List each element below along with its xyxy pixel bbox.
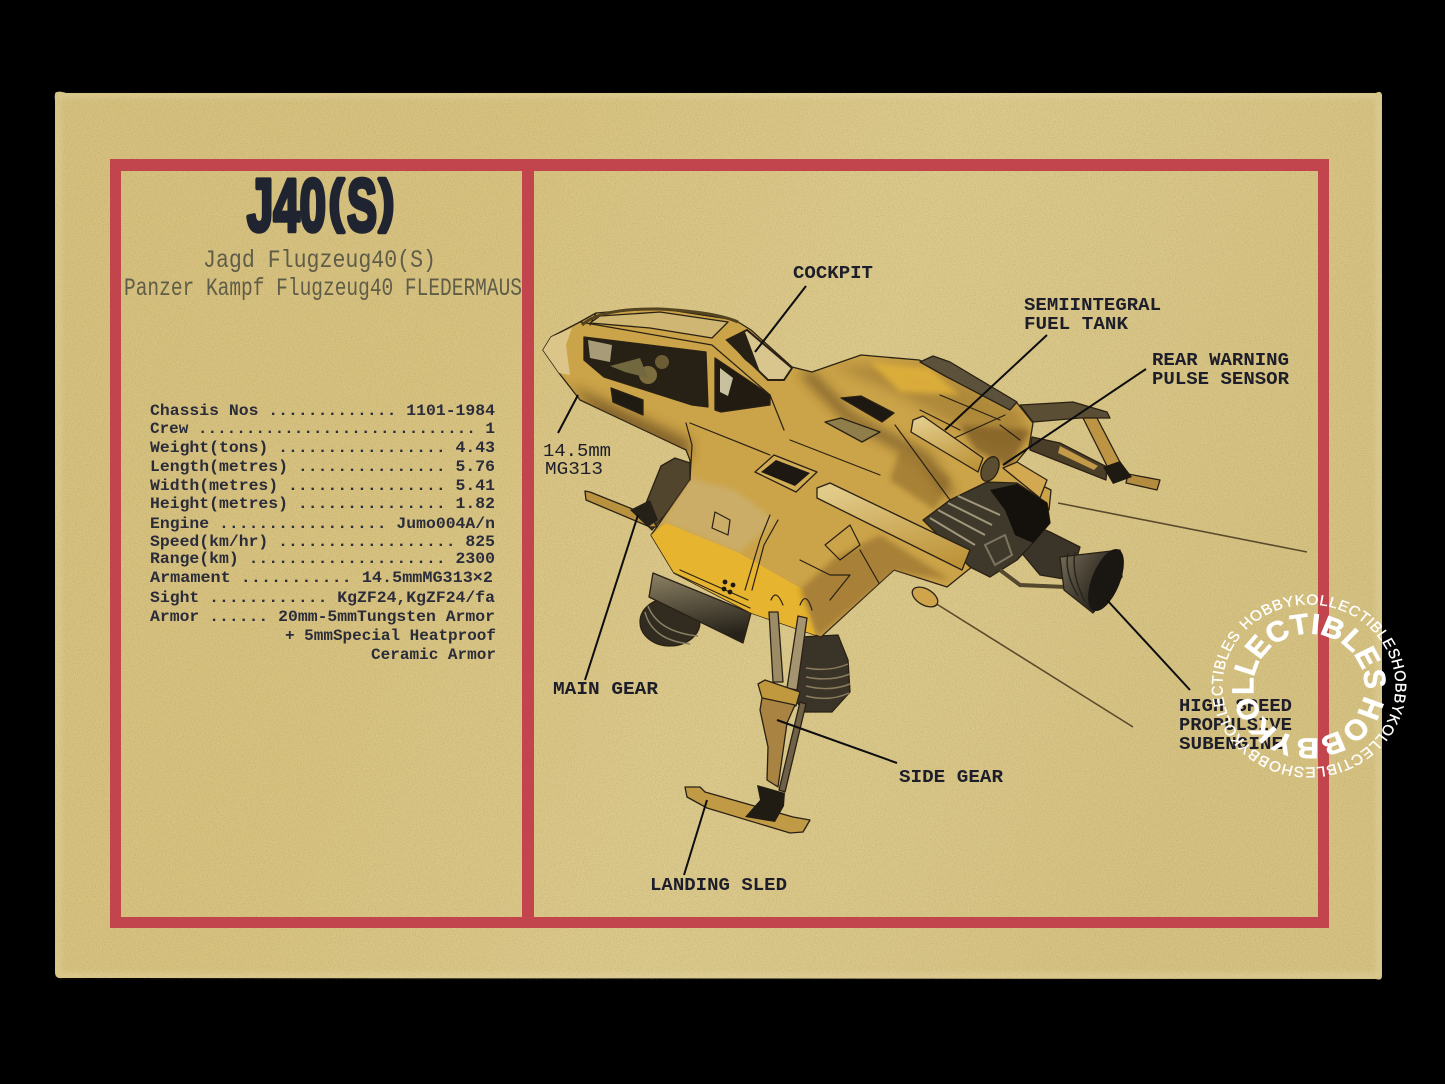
watermark stamp: HOBBYKOLLECTIBLESHOBBYKOLLECTIBLESHOBBYKOLLECTIBLES	[1212, 594, 1406, 778]
specification table: Sight ............ KgZF24,KgZF24/fa	[150, 589, 495, 607]
engine	[923, 482, 1066, 587]
label: subengine: SUBENGINE	[1179, 735, 1283, 755]
label: fuel tank: SEMIINTEGRAL	[1024, 296, 1161, 316]
hull hatches	[755, 455, 817, 492]
label: subengine	[1179, 697, 1292, 755]
specification table: Ceramic Armor	[371, 646, 496, 664]
specification table: Weight(tons) ................. 4.43	[150, 439, 495, 457]
label: landing sled: LANDING SLED	[650, 876, 787, 896]
panel lines	[580, 313, 1020, 610]
dorsal rail	[920, 356, 1017, 410]
wing trailing dark	[800, 535, 950, 637]
antennas	[935, 503, 1307, 727]
left gear and small ski	[585, 458, 690, 530]
label: pulse sensor	[1152, 351, 1289, 390]
specification table: Width(metres) ................ 5.41	[150, 477, 495, 495]
label: machine gun: MG313	[545, 460, 603, 480]
watermark stamp: HOBBYKOLLECTIBLES	[1232, 613, 1386, 758]
specification table: Speed(km/hr) .................. 825	[150, 533, 495, 551]
label: subengine: PROPULSIVE	[1179, 716, 1292, 736]
specification table: Length(metres) ............... 5.76	[150, 458, 495, 476]
subtitle	[124, 246, 522, 303]
rear landing gear nacelle	[795, 635, 850, 712]
panel: specifications	[124, 164, 522, 664]
specification table: Height(metres) ............... 1.82	[150, 495, 495, 513]
specification table: Chassis Nos ............. 1101-1984	[150, 402, 495, 420]
specification table	[150, 402, 496, 664]
subtitle: Panzer Kampf Flugzeug40 FLEDERMAUS	[124, 274, 522, 303]
specification table: Armor ...... 20mm-5mmTungsten Armor	[150, 608, 495, 626]
hull shading	[570, 385, 690, 460]
label: side gear: SIDE GEAR	[899, 768, 1003, 788]
label: fuel tank: FUEL TANK	[1024, 315, 1128, 335]
canopy	[582, 309, 894, 492]
wing dots	[722, 580, 735, 594]
title: (	[329, 169, 344, 233]
envelope paper panel	[55, 92, 1382, 980]
rear sensor rig	[1020, 402, 1160, 490]
exhaust throat	[1015, 525, 1080, 580]
red frame	[110, 159, 1329, 928]
label: cockpit: COCKPIT	[793, 264, 873, 284]
nose cone	[543, 328, 572, 375]
infographic canvas	[54, 92, 1406, 980]
wing faded panel	[660, 478, 775, 553]
label: main gear: MAIN GEAR	[553, 680, 658, 700]
title: S	[347, 164, 377, 247]
specification table: Armament ........... 14.5mmMG313×2	[150, 569, 493, 587]
label: machine gun	[543, 442, 611, 480]
main fuselage and wing	[543, 308, 1051, 640]
nose gear struts	[685, 612, 810, 833]
title: J40	[247, 164, 326, 247]
specification table: Crew ............................. 1	[150, 420, 495, 438]
specification table: Range(km) .................... 2300	[150, 550, 495, 568]
specification table: Engine ................. Jumo004A/n	[150, 515, 495, 533]
specification table: + 5mmSpecial Heatproof	[285, 627, 496, 645]
cockpit windows	[584, 337, 708, 407]
label: pulse sensor: REAR WARNING	[1152, 351, 1289, 371]
fuel tanks	[817, 416, 1047, 611]
exhaust nozzle	[1060, 544, 1131, 616]
callout labels	[543, 264, 1292, 896]
leader lines	[558, 286, 1190, 875]
title: )	[379, 169, 394, 233]
panel: aircraft illustration	[543, 308, 1307, 833]
label: machine gun: 14.5mm	[543, 442, 611, 462]
label: fuel tank	[1024, 296, 1161, 335]
label: pulse sensor: PULSE SENSOR	[1152, 370, 1289, 390]
wing yellow band	[651, 523, 817, 640]
lower pod and intake	[640, 573, 751, 646]
subtitle: Jagd Flugzeug40(S)	[203, 246, 436, 275]
label: subengine: HIGH SPEED	[1179, 697, 1292, 717]
